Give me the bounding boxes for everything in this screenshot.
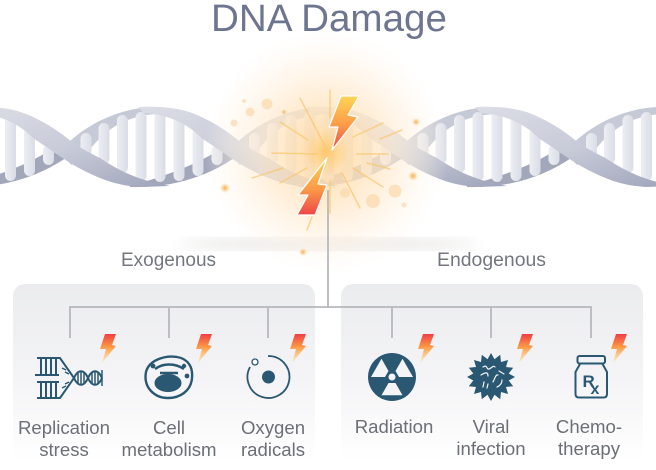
- label: Oxygen radicals: Oxygen: [241, 417, 305, 438]
- item: cell metabolism: [121, 334, 217, 460]
- connector lines: [70, 190, 591, 338]
- label: Chemotherapy: therapy: [558, 438, 621, 459]
- explosion glow: [204, 30, 448, 274]
- item: chemotherapy: [556, 334, 627, 459]
- DNA double helix: [0, 107, 656, 187]
- icon: medicine bottle: R: [582, 372, 595, 391]
- icon: oxygen radical: [247, 356, 289, 398]
- label: Radiation: Radiation: [355, 416, 433, 437]
- panel: endogenous: [341, 284, 643, 470]
- explosion rays: [252, 90, 402, 230]
- label: Viral infection: Viral: [473, 416, 509, 437]
- label: Viral infection: infection: [456, 438, 526, 459]
- item: viral infection: [456, 334, 533, 459]
- item: oxygen radicals: [241, 334, 306, 460]
- icon: medicine bottle: [576, 356, 607, 398]
- lightning bolt: upper: [329, 96, 359, 150]
- label: Replication stress: Replication: [18, 417, 110, 438]
- item: radiation: [355, 334, 434, 437]
- heading: Exogenous: Exogenous: [121, 250, 216, 271]
- icon: virus: [467, 353, 515, 401]
- label: Cell metabolism: metabolism: [121, 439, 217, 460]
- heading: Endogenous: Endogenous: [437, 250, 546, 271]
- explosion particles: [220, 98, 420, 256]
- item: replication stress: [18, 334, 116, 460]
- icon: medicine bottle: x: [590, 381, 600, 398]
- icon: radiation: [368, 353, 416, 401]
- icon: replication fork: [35, 358, 102, 398]
- panel: exogenous: [13, 284, 315, 470]
- shadow under DNA: [178, 238, 478, 250]
- label: Cell metabolism: Cell: [153, 417, 185, 438]
- label: Oxygen radicals: radicals: [241, 439, 305, 460]
- lightning bolt: lower: [297, 158, 327, 215]
- label: Replication stress: stress: [39, 439, 89, 460]
- icon: cell: [146, 357, 192, 398]
- label: Chemotherapy: Chemo-: [556, 416, 622, 437]
